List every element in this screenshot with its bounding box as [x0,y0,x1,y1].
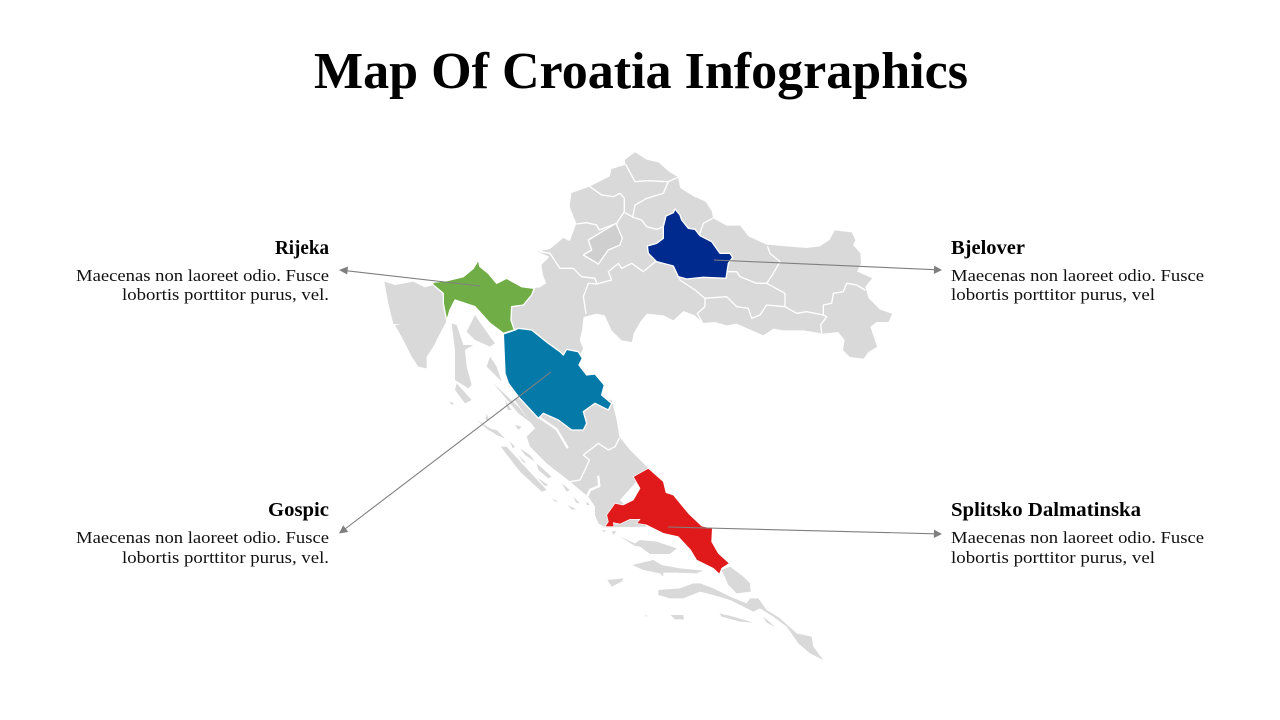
region: Gospic (blue) [503,328,612,430]
callout: Bjelover: lobortis porttitor purus, vel [951,285,1155,304]
region: Rijeka (green) [432,260,534,333]
callout: Bjelover: Bjelover [951,237,1025,259]
map: northern counties [511,153,892,358]
callout: Rijeka: Rijeka [275,237,329,259]
arrow: Bjelover [714,260,942,274]
region: Splitsko Dalmatinska (red) [605,468,729,574]
callout: Splitsko Dalmatinska: Splitsko Dalmatinska [951,499,1141,521]
map of Croatia [384,153,892,660]
callout: Rijeka: Maecenas non laoreet odio. Fusce [76,266,329,285]
callout: Rijeka: lobortis porttitor purus, vel. [122,285,329,304]
callout: Gospic: Maecenas non laoreet odio. Fusce [76,528,329,547]
arrow: Splitsko Dalmatinska [668,527,942,538]
callout: Bjelover [951,237,1204,304]
callout: Splitsko Dalmatinska: lobortis porttitor purus, vel [951,548,1155,567]
region: Bjelovar (navy) [647,209,733,279]
callout: Gospic: Gospic [268,499,329,521]
map: southern counties and islands [487,397,823,660]
callout: Splitsko Dalmatinska [951,499,1204,567]
arrow: Gospic [339,372,551,534]
map: Istria and northern Adriatic islands [384,260,612,438]
callout: Gospic [76,499,329,567]
arrow: Rijeka [339,266,480,286]
map: highlighted patch [583,223,622,264]
callout: Bjelover: Maecenas non laoreet odio. Fusce [951,266,1204,285]
callout: Gospic: lobortis porttitor purus, vel. [122,548,329,567]
callout: Rijeka [76,237,329,304]
callout: Splitsko Dalmatinska: Maecenas non laoreet odio. Fusce [951,528,1204,547]
title: Map Of Croatia Infographics [314,43,968,100]
